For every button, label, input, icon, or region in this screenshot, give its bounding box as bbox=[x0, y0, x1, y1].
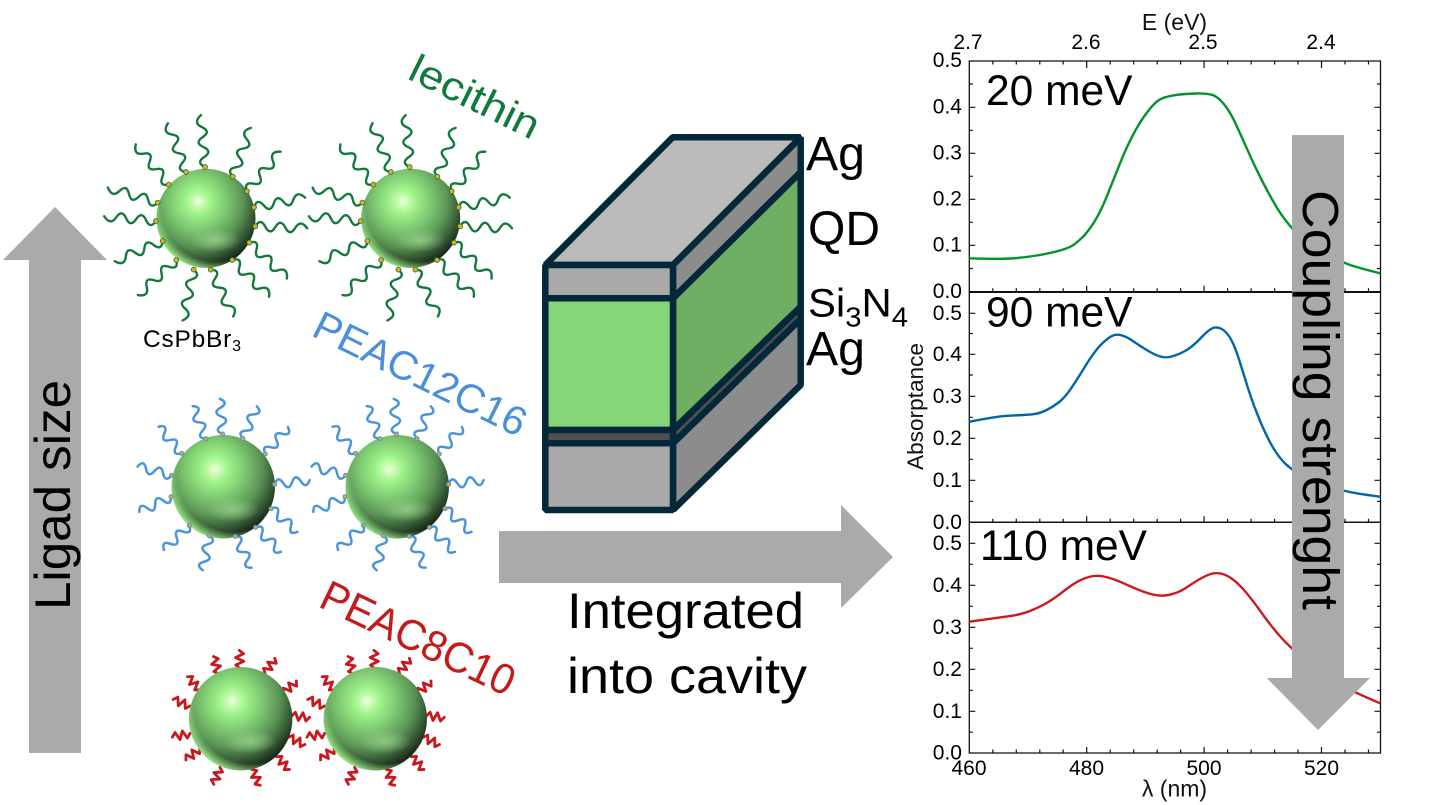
arrow: coupling strength bbox=[1267, 135, 1370, 730]
label: CsPbBr3: CsPbBr bbox=[143, 326, 231, 353]
text: Integrated into cavity: into cavity bbox=[567, 648, 807, 704]
panel: 110 meV: 0.3 bbox=[933, 616, 962, 639]
y axis title: Absorptance bbox=[903, 343, 928, 470]
bottom axis labels: 480 bbox=[1069, 757, 1104, 780]
panel: 20 meV: 0.4 bbox=[933, 96, 962, 118]
panel: 110 meV bbox=[933, 522, 1380, 764]
panel: 90 meV bbox=[933, 290, 1380, 534]
chart: absorptance spectra bbox=[903, 9, 1380, 802]
bottom axis title: λ (nm) bbox=[1142, 776, 1207, 802]
panel: 20 meV: 0.5 bbox=[933, 49, 962, 72]
layer label: Si3N4: 4 bbox=[892, 302, 908, 333]
layer label: Ag top: Ag bbox=[806, 128, 865, 181]
panel: 20 meV: 0.0 bbox=[933, 280, 962, 303]
quantum dot: PEAC12C16 left bbox=[136, 399, 310, 571]
label: lecithin: lecithin bbox=[402, 47, 547, 148]
panel: 90 meV: 0.5 bbox=[933, 302, 962, 325]
panel: 90 meV: 0.4 bbox=[933, 343, 962, 366]
panel: 90 meV: 0.1 bbox=[933, 469, 962, 492]
cavity stack diagram bbox=[545, 137, 801, 510]
panel: 20 meV: 0.2 bbox=[933, 188, 962, 210]
bottom axis labels: 520 bbox=[1304, 757, 1339, 780]
bottom axis labels: 500 bbox=[1186, 757, 1222, 780]
layer label: Si3N4: 3 bbox=[845, 302, 861, 333]
top axis labels: 2.4 bbox=[1306, 31, 1336, 54]
quantum dot: lecithin left bbox=[104, 115, 307, 321]
bottom axis labels: 460 bbox=[951, 757, 987, 780]
quantum dot: PEAC8C10 right bbox=[306, 650, 445, 787]
panel: 90 meV: 90 meV bbox=[986, 290, 1133, 337]
label: Coupling strenght: Coupling strenght bbox=[1292, 190, 1349, 610]
layer label: QD: QD bbox=[808, 203, 880, 256]
panel: 20 meV: 0.1 bbox=[933, 234, 962, 256]
layer label: Si3N4: N bbox=[861, 282, 892, 326]
panel: 110 meV: 0.4 bbox=[933, 574, 962, 597]
quantum dot: lecithin right bbox=[309, 115, 512, 321]
label: PEAC12C16: PEAC12C16 bbox=[306, 302, 534, 446]
top axis labels: 2.7 bbox=[953, 31, 983, 54]
panel: 90 meV: 0.3 bbox=[933, 385, 962, 408]
panel: 20 meV: 0.3 bbox=[933, 142, 962, 164]
panel: 20 meV: 20 meV bbox=[986, 68, 1133, 115]
arrow: ligand size bbox=[3, 207, 107, 753]
panel: 90 meV: 0.2 bbox=[933, 427, 962, 450]
panel: 110 meV: 0.0 bbox=[933, 742, 962, 764]
layer label: Ag bottom: Ag bbox=[806, 323, 865, 376]
panel: 110 meV: 0.5 bbox=[933, 532, 962, 555]
label: PEAC8C10: PEAC8C10 bbox=[313, 572, 523, 706]
bottom axis labels bbox=[951, 757, 1339, 780]
label: CsPbBr3: 3 bbox=[232, 338, 241, 355]
top axis title: E (eV) bbox=[1142, 9, 1207, 35]
panel: 110 meV: 0.2 bbox=[933, 658, 962, 681]
top axis labels: 2.6 bbox=[1071, 31, 1101, 54]
panel: 110 meV: 0.1 bbox=[933, 700, 962, 723]
quantum dot: PEAC8C10 left bbox=[172, 650, 310, 787]
quantum dot: PEAC12C16 right bbox=[310, 399, 484, 571]
layer label: Si3N4: Si bbox=[808, 282, 844, 326]
top axis labels bbox=[953, 31, 1336, 54]
panel: 90 meV: 0.0 bbox=[933, 511, 962, 534]
panel: 110 meV: 110 meV bbox=[980, 523, 1148, 570]
label: Ligad size: Ligad size bbox=[25, 380, 81, 610]
text: Integrated into cavity bbox=[567, 583, 807, 704]
panel: 20 meV bbox=[933, 49, 1380, 303]
top axis labels: 2.5 bbox=[1188, 31, 1218, 54]
arrow: integrated into cavity bbox=[499, 505, 893, 608]
text: Integrated into cavity: Integrated bbox=[567, 583, 804, 639]
